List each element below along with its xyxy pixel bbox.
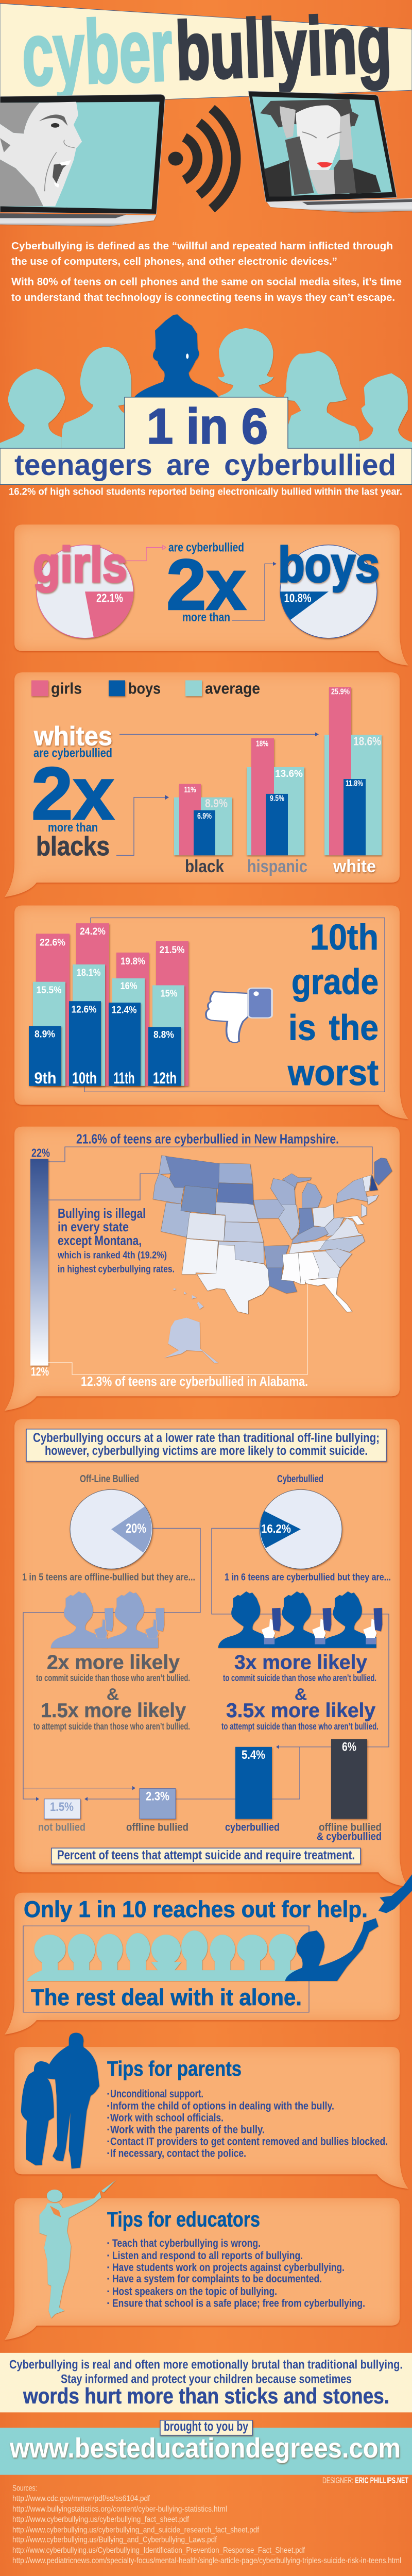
conclusion band	[0, 2353, 412, 2412]
grouped bars: 21.5%	[160, 944, 185, 956]
callout: Montana	[57, 1206, 175, 1275]
panel: tips for parents	[14, 2032, 408, 2189]
axis labels	[185, 857, 376, 876]
legend: color scale	[30, 1146, 50, 1378]
sources list	[12, 2484, 401, 2565]
legend: girls	[51, 680, 82, 697]
headline: 10th grade is the worst	[287, 917, 379, 1093]
heading: Tips for educators	[107, 2208, 260, 2231]
panel background	[14, 524, 408, 666]
tip list: ·	[107, 2099, 110, 2112]
grouped bars: 24.2%	[80, 926, 106, 937]
stat: 2x: 2x	[31, 753, 114, 835]
axis labels: hispanic	[247, 857, 307, 876]
legend: color scale: 22%	[31, 1146, 50, 1159]
grouped bars: 18.1%	[76, 967, 101, 978]
grouped bars: 19.8%	[121, 956, 145, 967]
panel: reaching out	[5, 1874, 412, 2035]
silhouette: parent and child	[21, 2032, 99, 2168]
banner strip	[0, 4, 412, 105]
bar chart: treatment: not bullied	[38, 1821, 85, 1833]
arrow: girls	[126, 546, 166, 561]
tip list: Have students work on projects against cyberbullying.	[112, 2261, 345, 2274]
panel background	[14, 1419, 408, 1887]
intro text: the use of computers, cell phones, and other electronic devices.”	[11, 256, 337, 267]
tip list: Inform the child of options in dealing with the bully.	[110, 2099, 334, 2112]
bars: white: 25.9%	[331, 688, 350, 696]
icon: offline bullied teens	[50, 1591, 164, 1648]
illustration: laptop with shouting bully	[0, 94, 165, 226]
arrow: boys	[232, 564, 274, 620]
bar chart: treatment: 1.5%	[50, 1800, 74, 1814]
grouped bars: 8.8%	[153, 1029, 174, 1040]
frame	[23, 1926, 309, 2012]
stat block: 1 in 6	[0, 397, 412, 484]
text: more than: more than	[182, 611, 230, 624]
bar chart: treatment: offline bullied	[126, 1821, 188, 1833]
grouped bars: 12.6%	[71, 1004, 97, 1015]
connectors	[23, 1528, 200, 1799]
bars: hispanic: 13.6%	[275, 769, 303, 779]
heading: only 1 in 10: Only 1 in 10 reaches out for help.	[24, 1896, 368, 1922]
tip list: Have a system for complaints to be documented.	[112, 2273, 322, 2285]
text: blacks: blacks	[36, 832, 110, 861]
bar chart: treatment: 5.4%	[242, 1748, 265, 1762]
tip list: ·	[107, 2123, 110, 2136]
panel: tips for educators	[5, 2180, 400, 2340]
headline: 10th grade is the worst: 10th	[310, 917, 379, 957]
bars: black: 11%	[184, 786, 196, 794]
text: the rest: The rest deal with it alone.	[31, 1985, 302, 2010]
intro text: Cyberbullying is defined as the “willful and repeated harm inflicted through	[11, 240, 393, 252]
chart: offline pie: Off-Line Bullied	[80, 1473, 139, 1485]
intro text: With 80% of teens on cell phones and the same on social media sites, it’s time	[11, 276, 402, 287]
brought to you by badge	[160, 2418, 252, 2435]
panel background	[5, 1893, 400, 2035]
tip list: ·	[107, 2261, 110, 2274]
tip list: Teach that cyberbullying is wrong.	[112, 2236, 261, 2249]
bar chart: treatment: offline bullied	[319, 1821, 382, 1833]
callout: Montana: except Montana,	[58, 1233, 142, 1248]
panel: suicide comparison	[14, 1419, 408, 1887]
tip list: Work with school officials.	[110, 2111, 224, 2124]
heading: Tips for parents	[107, 2057, 242, 2080]
text: whites: whites	[33, 721, 112, 751]
tip list: ·	[107, 2236, 110, 2249]
grouped bars: 15%	[161, 988, 177, 999]
headline: 10th grade is the worst: worst	[287, 1053, 379, 1093]
grouped bars: 12th	[153, 1069, 177, 1087]
axis labels: white	[333, 857, 376, 876]
connector: Alabama	[48, 1284, 307, 1375]
tip list: Listen and respond to all reports of bullying.	[112, 2249, 303, 2262]
sources list: http://www.cyberbullying.us/cyberbullying_and_suicide_research_fact_sheet.pdf	[12, 2526, 260, 2534]
panel background	[5, 2198, 400, 2340]
sources list: http://www.cyberbullying.us/Bullying_and_Cyberbullying_Laws.pdf	[12, 2536, 217, 2544]
grouped bars: 22.6%	[40, 937, 65, 948]
illustration: laptop with crying victim	[248, 91, 412, 212]
callout: Montana: Bullying is illegal	[58, 1206, 146, 1221]
panel: race chart	[5, 672, 400, 897]
bar chart: treatment: & cyberbullied	[317, 1830, 382, 1843]
brought to you by badge: brought to you by	[164, 2418, 248, 2434]
grouped bars: 10th	[72, 1069, 97, 1087]
silhouettes: group of teens	[0, 314, 412, 449]
bars: hispanic: 9.5%	[270, 794, 284, 803]
tip list	[107, 2236, 365, 2309]
sponsor band	[0, 2418, 412, 2475]
grouped bars: 12.4%	[111, 1005, 136, 1015]
panel: US map	[5, 1127, 400, 1411]
tip list: If necessary, contact the police.	[110, 2147, 246, 2160]
title banner	[0, 0, 412, 105]
stat: 2x: 2x	[166, 545, 246, 625]
connector frame	[84, 918, 385, 1092]
headline: 10th grade is the worst: is the	[288, 1008, 379, 1047]
grouped bars: 8.9%	[35, 1029, 55, 1040]
stats: cyber: 3.5x more likely	[226, 1700, 375, 1722]
sources list: http://www.cyberbullying.us/Cyberbullying_Identification_Prevention_Response_Fact_Sheet.pdf	[12, 2546, 305, 2555]
stats: offline: to attempt suicide than those who aren’t bullied.	[33, 1721, 190, 1732]
bars: black	[174, 784, 232, 855]
stats: offline	[33, 1651, 190, 1732]
stats: offline: to commit suicide than those who aren’t bullied.	[36, 1672, 190, 1683]
legend: boys	[128, 680, 161, 697]
grouped bars: 11th	[113, 1069, 134, 1087]
grouped bars	[29, 923, 188, 1087]
callout box	[26, 1429, 386, 1461]
sources list: http://www.cyberbullying.us/cyberbullying_fact_sheet.pdf	[12, 2515, 190, 2524]
label: girls: girls	[33, 537, 127, 592]
tip list: ·	[107, 2088, 110, 2100]
tip list: ·	[107, 2147, 110, 2160]
panel background	[5, 1127, 400, 1411]
bars: black: 8.9%	[205, 796, 228, 810]
tip list: ·	[107, 2273, 110, 2285]
panel: grade chart	[14, 905, 408, 1119]
chart: girls pie: 22.1%	[96, 591, 123, 604]
stats: cyber: 3x more likely	[234, 1651, 367, 1673]
text: more than: more than	[48, 821, 98, 835]
panel background	[14, 2047, 408, 2189]
intro text: to understand that technology is connecting teens in ways they can’t escape.	[11, 292, 395, 303]
bars: black: 6.9%	[197, 812, 212, 821]
tip list: Host speakers on the topic of bullying.	[112, 2285, 277, 2297]
chart: offline pie: 20%	[126, 1521, 146, 1536]
bars: white: 18.6%	[353, 735, 381, 748]
stats: offline: &	[107, 1685, 119, 1704]
bar chart: treatment: cyberbullied	[225, 1821, 280, 1833]
tip list: Unconditional support.	[110, 2088, 203, 2100]
axis labels: black	[185, 857, 224, 876]
bar chart: treatment	[38, 1739, 382, 1843]
grouped bars: 9th	[34, 1069, 57, 1087]
icon: wifi signal	[168, 109, 236, 209]
connector: New Hampshire	[48, 1147, 372, 1174]
stats: cyber	[221, 1651, 379, 1732]
label: boys: boys	[278, 537, 380, 592]
icon: cyberbullied teens	[218, 1591, 382, 1648]
headline: 10th grade is the worst: grade	[291, 962, 379, 1002]
map of states	[153, 1156, 392, 1363]
captions: 1 in 5 teens are offline-bullied but they are...	[22, 1572, 195, 1583]
sources list: http://www.cdc.gov/mmwr/pdf/ss/ss6104.pdf	[12, 2495, 150, 2503]
bars: hispanic: 18%	[256, 740, 268, 748]
tip list: ·	[107, 2249, 110, 2262]
callout: Montana: which is ranked 4th (19.2%)	[57, 1250, 167, 1261]
bars: hispanic	[247, 738, 304, 855]
grouped bars: 16%	[120, 980, 137, 992]
chart: cyber pie: Cyberbullied	[277, 1473, 323, 1485]
bar chart: treatment: 6%	[342, 1740, 356, 1754]
chart: girls pie	[37, 545, 133, 638]
chart: boys pie	[280, 545, 377, 638]
sources list: Sources:	[12, 2484, 37, 2493]
legend: average	[205, 680, 260, 697]
illustration: arm reaching down	[379, 1874, 412, 1913]
headline: teenagers are cyberbullied	[14, 449, 396, 482]
stats: offline: 1.5x more likely	[41, 1700, 186, 1722]
legend: color scale: 12%	[31, 1365, 49, 1378]
arrow: blacks	[116, 795, 169, 855]
icon: thumbs down	[206, 988, 272, 1043]
heading: New Hampshire: 21.6% of teens are cyberbullied in New Hampshire.	[76, 1131, 339, 1146]
callout: Montana: in highest cyberbullying rates.	[58, 1264, 175, 1275]
chart: cyber pie	[260, 1473, 342, 1569]
tip list: ·	[107, 2111, 110, 2124]
panel background	[14, 905, 408, 1119]
text: are cyberbullied: are cyberbullied	[33, 747, 112, 760]
tip list: ·	[107, 2285, 110, 2297]
legend	[31, 680, 260, 697]
bars: white	[324, 687, 382, 855]
grouped bars: 15.5%	[36, 985, 62, 996]
chart: boys pie: 10.8%	[284, 591, 312, 604]
intro text	[11, 240, 402, 303]
tip list: ·	[107, 2297, 110, 2309]
captions	[22, 1572, 391, 1583]
arrow: whites	[119, 733, 319, 736]
chart: offline pie	[70, 1473, 152, 1569]
caption: Alabama: 12.3% of teens are cyberbullied in Alabama.	[81, 1374, 308, 1389]
sources list: http://www.bullyingstatistics.org/content/cyber-bullying-statistics.html	[12, 2505, 227, 2514]
text: are cyberbullied: are cyberbullied	[168, 541, 244, 554]
panel: girls vs boys	[14, 524, 408, 666]
chart: cyber pie: 16.2%	[261, 1522, 291, 1535]
silhouettes: row of teens	[27, 1930, 297, 1981]
connector: Montana	[48, 1174, 196, 1200]
silhouette: teacher with pointer	[40, 2180, 116, 2318]
tip list: Work with the parents of the bully.	[110, 2123, 265, 2136]
stats: offline: 2x more likely	[47, 1651, 180, 1673]
tip list	[107, 2088, 388, 2160]
panel background	[5, 672, 400, 897]
callout: Montana: in every state	[58, 1219, 129, 1234]
stats: cyber: &	[295, 1685, 307, 1704]
bar chart: treatment: 2.3%	[146, 1790, 169, 1804]
silhouette: teen reaching up	[285, 1918, 379, 1981]
big number: 1 in 6	[147, 398, 268, 454]
bars: white: 11.8%	[346, 779, 363, 788]
tip list: ·	[107, 2135, 110, 2148]
